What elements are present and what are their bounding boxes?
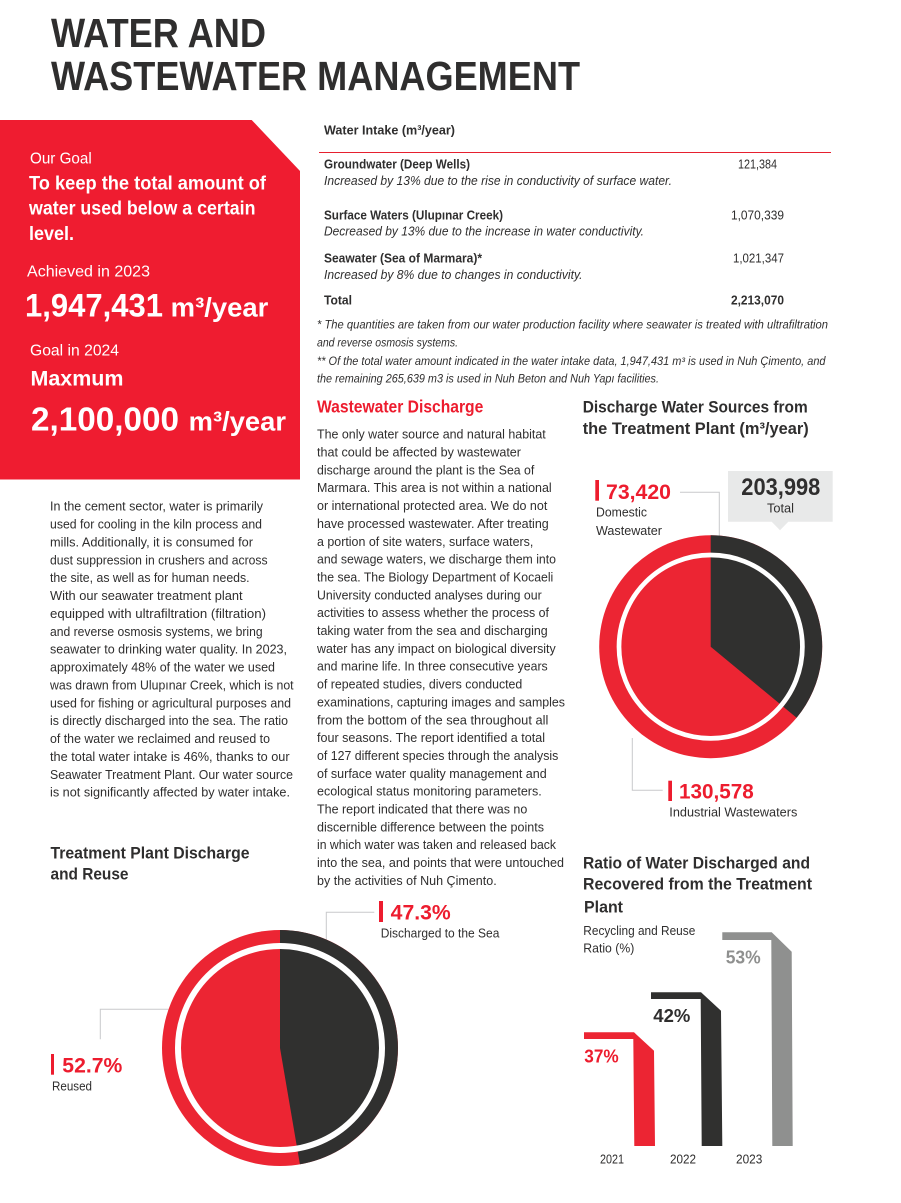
- bar: 2023: 53%: [726, 948, 761, 968]
- goal in 2024: 2,100,000: [31, 401, 179, 438]
- heading: wastewater discharge: Wastewater Discharge: [317, 397, 484, 417]
- achieved in 2023: m³/year: [171, 293, 269, 323]
- text block: sector intro: dust suppression in crushers and across: [50, 552, 268, 567]
- text block: wastewater discharge: and marine life. In three consecutive years: [317, 659, 548, 674]
- heading: discharge water sources: Discharge Water Sources from: [583, 399, 808, 417]
- text block: wastewater discharge: the sea. The Biology Department of Kocaeli: [317, 570, 553, 584]
- text block: wastewater discharge: four seasons. The report identified a total: [317, 730, 545, 745]
- achieved in 2023: Achieved in 2023: [27, 264, 150, 281]
- row: seawater: Increased by 8% due to changes in conductivity.: [324, 267, 582, 282]
- label: discharged to the sea: [379, 901, 500, 941]
- label: reused: [51, 1054, 123, 1094]
- text block: wastewater discharge: into the sea, and points that were untouched: [317, 855, 564, 870]
- label: domestic wastewater: Domestic: [596, 505, 647, 520]
- heading: ratio of water discharged and recovered: [583, 854, 812, 917]
- footnotes: * The quantities are taken from our water production facility where seawater is treated with ultrafiltration: [317, 319, 828, 331]
- row: groundwater: Increased by 13% due to the rise in conductivity of surface water.: [324, 173, 672, 188]
- goal in 2024: Maxmum: [30, 368, 124, 391]
- our goal: Our Goal: [30, 150, 92, 168]
- text block: wastewater discharge: of 127 different species through the analysis: [317, 748, 559, 763]
- row: surface waters: [324, 208, 784, 239]
- bar: 2022: [651, 992, 722, 1166]
- row: groundwater: 121,384: [738, 156, 777, 172]
- heading: treatment plant discharge and reuse: [50, 844, 250, 883]
- row: seawater: [324, 251, 784, 282]
- chart: discharge water sources pie: [595, 471, 833, 820]
- chart subtitle: Ratio (%): [583, 941, 634, 956]
- bar: 2023: [722, 932, 793, 1166]
- row: groundwater: [324, 156, 777, 188]
- text block: wastewater discharge: The only water source and natural habitat: [317, 427, 546, 442]
- callout: total: 203,998: [741, 474, 820, 501]
- table: water intake: [319, 122, 831, 308]
- text block: sector intro: the site, as well as for human needs.: [50, 570, 250, 585]
- leader line: domestic: [680, 492, 719, 536]
- text block: sector intro: In the cement sector, water is primarily: [50, 499, 263, 514]
- goal in 2024: Goal in 2024: [30, 343, 119, 360]
- our goal: water used below a certain: [28, 199, 256, 220]
- footnotes: and reverse osmosis systems.: [317, 338, 458, 350]
- label: domestic wastewater: Wastewater: [596, 523, 663, 538]
- panel: goal: [0, 120, 300, 480]
- callout: total: Total: [767, 501, 794, 516]
- row: seawater: Seawater (Sea of Marmara)*: [324, 251, 483, 266]
- heading: treatment plant discharge and reuse: and Reuse: [50, 865, 128, 883]
- text block: sector intro: the total water intake is 46%, thanks to our: [50, 749, 290, 764]
- heading: treatment plant discharge and reuse: Treatment Plant Discharge: [50, 844, 250, 862]
- row: surface waters: Surface Waters (Ulupınar Creek): [324, 208, 503, 222]
- achieved in 2023: 1,947,431: [25, 288, 163, 324]
- row: surface waters: Decreased by 13% due to the increase in water conductivity.: [324, 224, 644, 239]
- text block: wastewater discharge: of repeated studies, divers conducted: [317, 677, 522, 692]
- leader line: discharged: [326, 912, 374, 940]
- chart subtitle: Recycling and Reuse: [583, 923, 695, 938]
- text block: sector intro: used for cooling in the kiln process and: [50, 517, 262, 532]
- achieved in 2023: [25, 264, 269, 324]
- text block: wastewater discharge: or international protected area. We do not: [317, 498, 548, 513]
- row: seawater: 1,021,347: [733, 251, 784, 266]
- text block: sector intro: seawater to drinking water quality. In 2023,: [50, 642, 287, 657]
- row: groundwater: Groundwater (Deep Wells): [324, 156, 470, 172]
- bar: 2023: 2023: [736, 1151, 762, 1166]
- text block: wastewater discharge: in which water was taken and released back: [317, 837, 556, 852]
- text block: wastewater discharge: [316, 427, 565, 888]
- chart: treatment plant discharge pie: [51, 901, 500, 1166]
- text block: sector intro: approximately 48% of the water we used: [50, 660, 275, 675]
- label: reused: 52.7%: [62, 1055, 123, 1078]
- our goal: [28, 150, 267, 245]
- label: industrial wastewaters: [668, 780, 798, 820]
- our goal: level.: [29, 224, 74, 245]
- pie: [599, 535, 822, 758]
- text block: wastewater discharge: discharge around the plant is the Sea of: [317, 462, 535, 477]
- text block: sector intro: mills. Additionally, it is consumed for: [50, 534, 254, 550]
- text block: wastewater discharge: and sewage waters, we discharge them into: [317, 552, 556, 567]
- text block: sector intro: was drawn from Ulupınar Creek, which is not: [49, 678, 294, 692]
- text block: wastewater discharge: ecological status monitoring parameters.: [317, 784, 542, 799]
- text block: wastewater discharge: Marmara. This area is not within a national: [317, 480, 552, 495]
- text block: sector intro: equipped with ultrafiltration (filtration): [50, 606, 266, 621]
- label: domestic wastewater: [595, 480, 671, 538]
- text block: wastewater discharge: examinations, capturing images and samples: [317, 694, 565, 709]
- text block: sector intro: With our seawater treatment plant: [50, 588, 243, 603]
- text block: sector intro: [49, 499, 294, 800]
- heading: ratio of water discharged and recovered: Recovered from the Treatment: [583, 876, 812, 894]
- chart subtitle: [583, 923, 695, 956]
- text block: sector intro: is not significantly affected by water intake.: [50, 785, 290, 800]
- goal in 2024: m³/year: [189, 407, 286, 437]
- bar: 2021: 2021: [600, 1151, 624, 1166]
- heading: discharge water sources: [583, 399, 809, 438]
- text block: wastewater discharge: discernible difference between the points: [317, 819, 544, 834]
- label: discharged to the sea: 47.3%: [391, 901, 451, 924]
- text block: wastewater discharge: water has any impact on biological diversity: [316, 641, 556, 656]
- text block: sector intro: and reverse osmosis systems, we bring: [50, 624, 263, 639]
- panel background: [0, 120, 300, 480]
- footnotes: ** Of the total water amount indicated in the water intake data, 1,947,431 m³ is used in Nuh Çimento, and: [317, 356, 826, 368]
- pie: [162, 930, 398, 1166]
- heading: ratio of water discharged and recovered: Ratio of Water Discharged and: [583, 854, 810, 872]
- title: WATER AND: [51, 10, 266, 56]
- title: WASTEWATER MANAGEMENT: [51, 53, 580, 99]
- leader line: reused: [100, 1009, 168, 1039]
- footnotes: [317, 319, 828, 386]
- row: total: Total: [324, 292, 352, 308]
- title: [51, 10, 580, 99]
- text block: wastewater discharge: activities to assess whether the process of: [317, 605, 549, 620]
- text block: wastewater discharge: a portion of site waters, surface waters,: [317, 534, 533, 549]
- label: discharged to the sea: Discharged to the Sea: [381, 926, 500, 941]
- text block: wastewater discharge: from the bottom of the sea throughout all: [317, 712, 548, 727]
- goal in 2024: [30, 343, 286, 438]
- text block: wastewater discharge: of surface water quality management and: [317, 766, 547, 781]
- heading: ratio of water discharged and recovered: Plant: [584, 899, 623, 917]
- callout: total: [728, 471, 833, 530]
- bar: 2022: 2022: [670, 1151, 696, 1166]
- text block: sector intro: Seawater Treatment Plant. Our water source: [50, 767, 293, 782]
- text block: wastewater discharge: that could be affected by wastewater: [317, 444, 522, 460]
- text block: wastewater discharge: University conducted analyses during our: [317, 587, 542, 602]
- text block: sector intro: of the water we reclaimed and reused to: [50, 731, 270, 746]
- row: total: 2,213,070: [731, 292, 784, 308]
- bar: 2021: [584, 1032, 655, 1166]
- text block: sector intro: is directly discharged into the sea. The ratio: [50, 713, 288, 728]
- bar: 2021: 37%: [584, 1047, 619, 1067]
- label: industrial wastewaters: 130,578: [679, 780, 754, 803]
- text block: wastewater discharge: taking water from the sea and discharging: [317, 623, 548, 638]
- row: total: [324, 292, 784, 308]
- footnotes: the remaining 265,639 m3 is used in Nuh Beton and Nuh Yapı facilities.: [317, 374, 659, 386]
- text block: wastewater discharge: by the activities of Nuh Çimento.: [317, 873, 497, 888]
- text block: wastewater discharge: The report indicated that there was no: [317, 802, 527, 816]
- chart: recycling and reuse ratio: [583, 923, 793, 1166]
- text block: wastewater discharge: have processed wastewater. After treating: [317, 516, 549, 531]
- leader line: industrial: [632, 738, 663, 790]
- row: surface waters: 1,070,339: [731, 208, 784, 222]
- label: reused: Reused: [52, 1079, 92, 1094]
- table heading: Water Intake (m³/year): [324, 122, 455, 138]
- bar: 2022: 42%: [653, 1006, 690, 1026]
- text block: sector intro: used for fishing or agricultural purposes and: [50, 695, 291, 710]
- heading: discharge water sources: the Treatment Plant (m³/year): [583, 420, 809, 438]
- our goal: To keep the total amount of: [29, 173, 267, 194]
- label: industrial wastewaters: Industrial Wastewaters: [669, 805, 798, 820]
- label: domestic wastewater: 73,420: [606, 481, 671, 504]
